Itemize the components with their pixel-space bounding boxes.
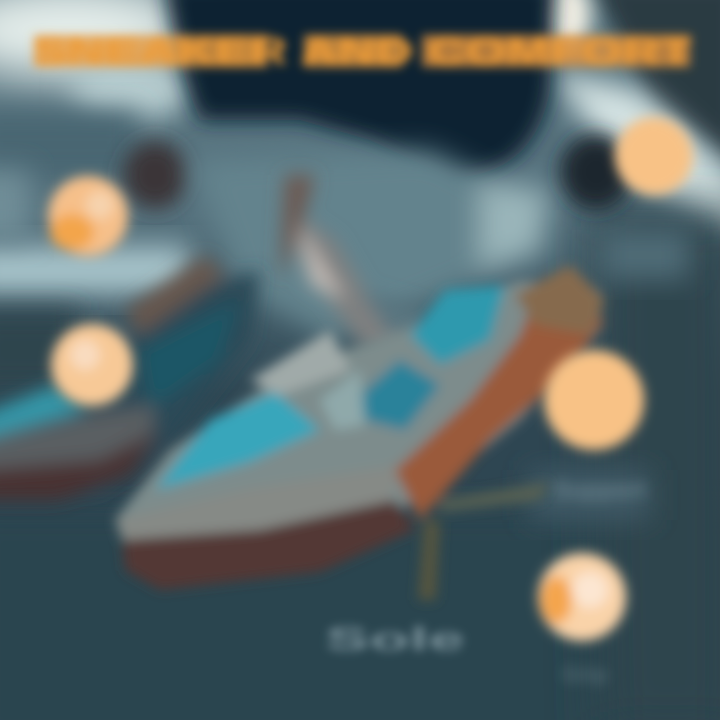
illustration: front sneaker <box>115 265 605 600</box>
marker: middle left circle <box>51 324 133 406</box>
title: SNEAKER AND COMFORT <box>32 31 692 73</box>
dark trousers <box>123 0 632 210</box>
illustration: lace details <box>280 175 430 350</box>
marker: right circle <box>544 350 644 450</box>
caption: bottom right: Grip <box>562 662 608 687</box>
caption: bottom centre: Sole <box>325 621 465 657</box>
marker: bottom right circle <box>538 553 626 641</box>
marker: upper left circle <box>48 176 128 256</box>
illustration: rear sneaker <box>0 255 260 500</box>
caption: right: Support <box>554 477 646 504</box>
illustration: laces and ankle <box>190 150 550 340</box>
marker: top right circle <box>615 117 693 195</box>
